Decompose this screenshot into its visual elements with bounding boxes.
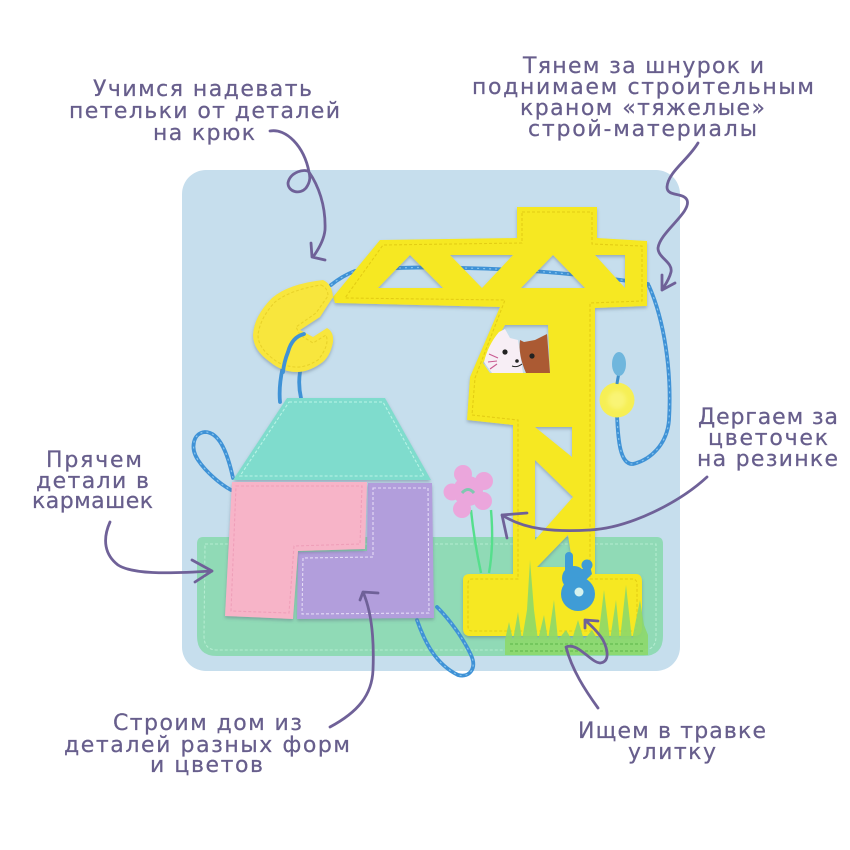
arrow: to snail	[566, 620, 607, 708]
arrow: to hook	[270, 131, 325, 260]
label: crane cord: краном «тяжелые»	[520, 96, 765, 121]
green felt mat	[197, 537, 663, 656]
label: flower elastic	[697, 405, 838, 472]
pink L-shaped piece	[225, 482, 367, 619]
icon: pink flower button with stems	[444, 465, 493, 573]
label: hook loops: Учимся надевать	[93, 77, 312, 102]
felt board background	[182, 170, 680, 671]
label: pocket: детали в	[36, 469, 149, 494]
label: snail: улитку	[628, 740, 716, 765]
grass strip	[505, 560, 648, 655]
label: pocket: Прячем	[46, 448, 142, 473]
mint house roof	[233, 398, 431, 480]
label: hook loops: на крюк	[153, 121, 255, 146]
arrow: to flower	[502, 477, 707, 538]
yellow pompom	[600, 382, 634, 418]
label: crane cord: поднимаем строительным	[472, 75, 814, 100]
icon: blue snail button	[561, 552, 595, 611]
cord loop below purple piece	[417, 607, 473, 676]
blue pompom cord end	[612, 352, 626, 384]
icon: cat and kitten in cab window	[484, 329, 550, 373]
cord over hook	[283, 334, 304, 372]
label: hook loops: петельки от деталей	[69, 99, 340, 124]
cord loops under hook	[280, 335, 303, 402]
label: build house: деталей разных форм	[64, 733, 350, 758]
arrow: to house pieces	[330, 592, 378, 727]
label: crane cord	[472, 54, 814, 142]
label: flower elastic: цветочек	[708, 426, 828, 451]
cord loop left of house	[194, 432, 233, 490]
label: flower elastic: Дергаем за	[698, 405, 838, 430]
crane	[333, 207, 647, 636]
label: snail: Ищем в травке	[578, 719, 766, 744]
label: pocket	[32, 448, 153, 514]
label: build house	[64, 711, 350, 778]
cord with pompom on right	[617, 286, 670, 464]
arrow: to pocket	[106, 522, 212, 582]
label: crane cord: строй-материалы	[528, 117, 757, 142]
label: hook loops	[69, 77, 340, 146]
label: build house: Строим дом из	[113, 711, 302, 736]
yellow hook	[253, 280, 333, 372]
label: flower elastic: на резинке	[697, 447, 838, 472]
purple Z-shaped piece	[297, 483, 434, 619]
label: crane cord: Тянем за шнурок и	[522, 54, 764, 79]
cord through crane arm	[331, 267, 648, 285]
arrow: to crane cord	[658, 143, 698, 290]
label: snail	[578, 719, 766, 765]
label: pocket: кармашек	[32, 489, 153, 514]
label: build house: и цветов	[150, 753, 263, 778]
